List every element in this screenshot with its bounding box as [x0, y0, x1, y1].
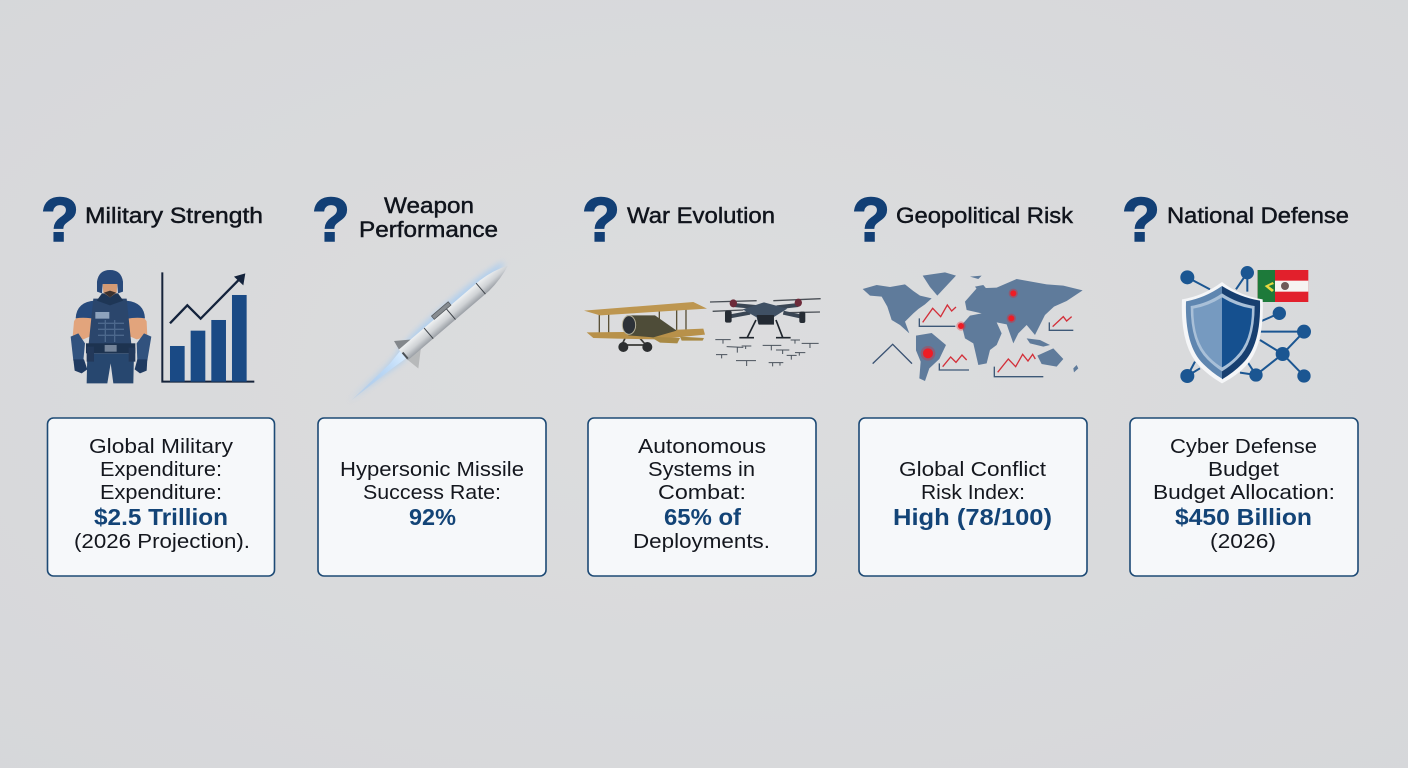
- icon: shield: [1182, 282, 1263, 383]
- illustration: shield, network and flag: [1181, 267, 1310, 383]
- panel: national defense: [1122, 186, 1358, 576]
- icon: hypersonic missile: [338, 253, 521, 417]
- card: cyber defense budget: (2026): [1210, 530, 1276, 553]
- card: global military expenditure: (2026 Projection).: [74, 530, 250, 553]
- panel: weapon performance: [312, 186, 546, 576]
- icon: biplane: [584, 302, 707, 352]
- map: continents: [863, 272, 1083, 381]
- card: hypersonic missile success: 92%: [409, 504, 456, 530]
- icon: flag: [1258, 270, 1308, 302]
- illustration: world risk map: [863, 272, 1083, 381]
- heading: war evolution: War Evolution: [627, 203, 775, 228]
- card: global conflict risk index: [859, 418, 1087, 576]
- card: global conflict risk index: Global Conflict: [899, 458, 1046, 481]
- heading: weapon performance: [359, 193, 498, 242]
- card: cyber defense budget: [1130, 418, 1358, 576]
- card: global conflict risk index: Risk Index:: [921, 481, 1025, 504]
- card: global military expenditure: $2.5 Trillion: [94, 504, 228, 530]
- card: global military expenditure: Global Military: [89, 435, 234, 458]
- card: global military expenditure: Expenditure:: [100, 481, 222, 504]
- heading: geopolitical risk: Geopolitical Risk: [896, 203, 1074, 228]
- panel: geopolitical risk: [852, 186, 1087, 576]
- mini trend charts: [873, 305, 1073, 377]
- card: autonomous systems in combat: Deployments.: [633, 530, 770, 553]
- card: hypersonic missile success: Success Rate:: [363, 481, 501, 504]
- card: cyber defense budget: Cyber Defense: [1170, 435, 1317, 458]
- icon: question mark: ?: [41, 186, 79, 255]
- card: hypersonic missile success: Hypersonic Missile: [340, 458, 524, 481]
- card: cyber defense budget: Budget: [1208, 458, 1279, 481]
- panel: war evolution: [582, 186, 821, 576]
- risk hotspots: [921, 289, 1018, 361]
- card: hypersonic missile success: [318, 418, 546, 576]
- icon: question mark: ?: [852, 186, 890, 255]
- card: autonomous systems in combat: Autonomous: [638, 435, 766, 458]
- icon: question mark: ?: [582, 186, 620, 255]
- card: autonomous systems in combat: Combat:: [658, 481, 746, 504]
- icon: question mark: ?: [1122, 186, 1160, 255]
- icon: armored soldier: [71, 270, 254, 383]
- card: autonomous systems in combat: Systems in: [648, 458, 755, 481]
- heading: weapon performance: Weapon: [384, 193, 474, 218]
- card: autonomous systems in combat: [588, 418, 816, 576]
- icon: question mark: ?: [312, 186, 350, 255]
- card: global military expenditure: Expenditure:: [100, 458, 222, 481]
- panel: military strength: [41, 186, 274, 576]
- card: cyber defense budget: Budget Allocation:: [1153, 481, 1335, 504]
- card: global military expenditure: [48, 418, 274, 576]
- chart: rising bars and arrow: [162, 272, 254, 382]
- illustration: biplane and drones: [584, 299, 821, 366]
- icon: large quadcopter: [710, 299, 821, 338]
- icon: drone swarm: [715, 340, 819, 366]
- heading: national defense: National Defense: [1167, 203, 1349, 228]
- network nodes: [1181, 267, 1310, 382]
- card: autonomous systems in combat: 65% of: [664, 504, 741, 530]
- card: cyber defense budget: $450 Billion: [1175, 504, 1312, 530]
- heading: military strength: Military Strength: [85, 203, 263, 228]
- card: global conflict risk index: High (78/100): [893, 504, 1052, 530]
- heading: weapon performance: Performance: [359, 217, 498, 242]
